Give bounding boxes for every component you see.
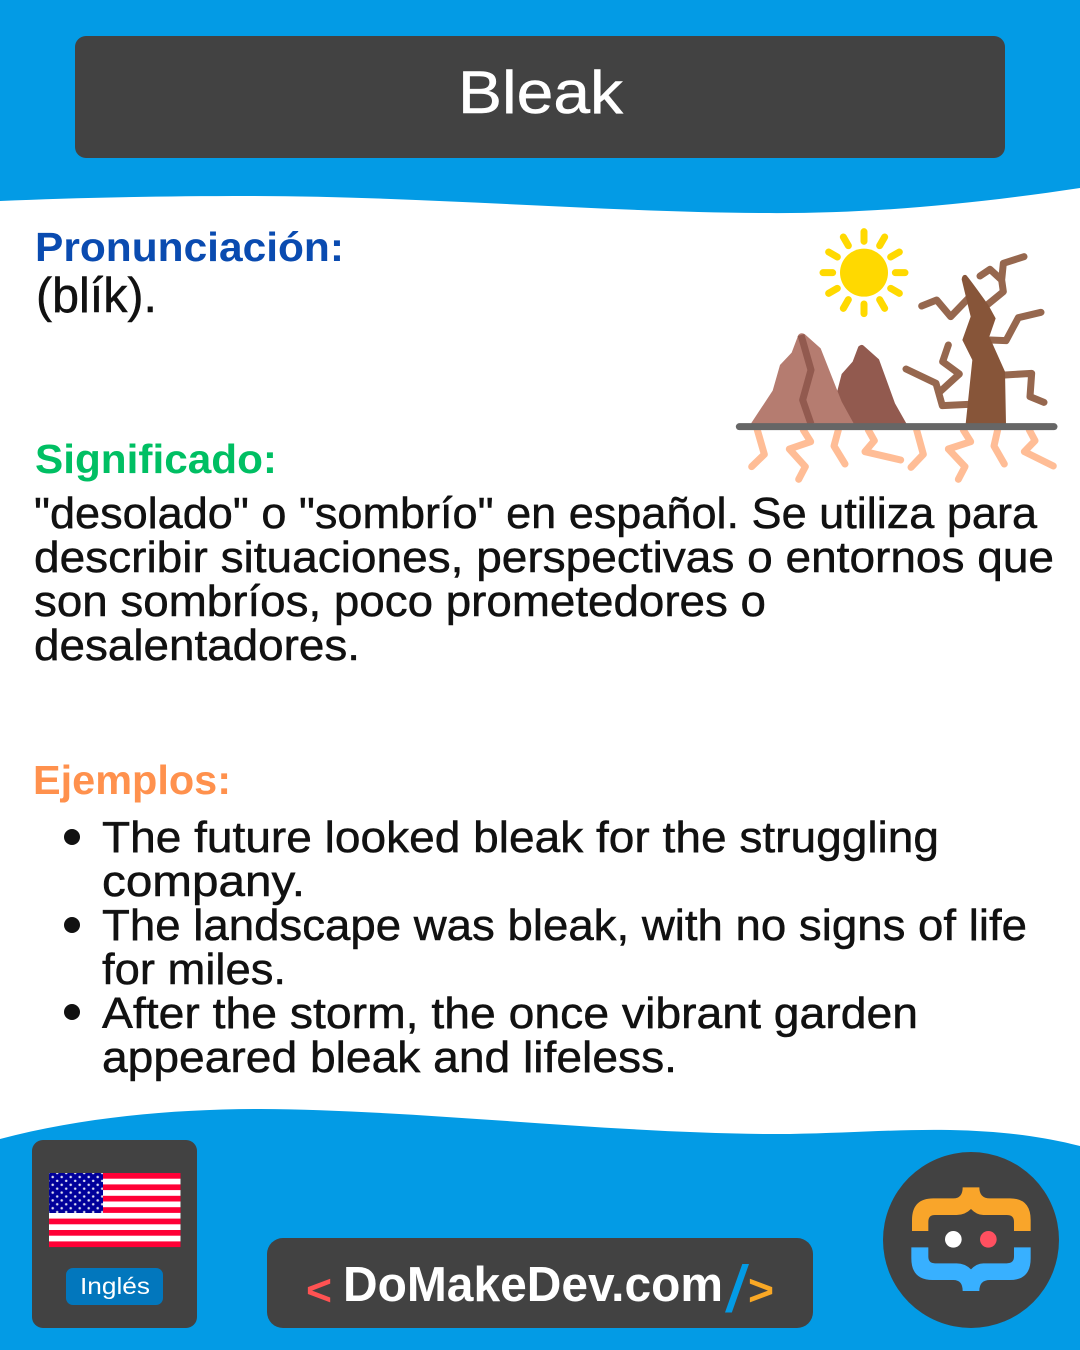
example 1: company. bbox=[102, 857, 305, 906]
example 3 bbox=[64, 989, 918, 1082]
icon: tree branches bbox=[906, 257, 1044, 406]
language badge bbox=[66, 1268, 163, 1305]
heading: examples: Ejemplos: bbox=[33, 757, 231, 803]
website name: DoMakeDev.com bbox=[343, 1258, 723, 1312]
logo: red dot bbox=[980, 1231, 997, 1248]
example 1 bbox=[64, 813, 939, 906]
example 3: After the storm, the once vibrant garden bbox=[102, 989, 918, 1038]
logo: blue brace bbox=[911, 1247, 1031, 1291]
heading: pronunciation: Pronunciación: bbox=[35, 224, 344, 270]
heading: meaning: Significado: bbox=[35, 436, 277, 482]
example 2: for miles. bbox=[102, 945, 286, 994]
icon: ground line bbox=[739, 416, 1054, 437]
footer wave band bbox=[0, 1109, 1080, 1350]
title: Bleak bbox=[458, 59, 624, 126]
header wave band bbox=[0, 0, 1080, 213]
meaning paragraph: son sombríos, poco prometedores o bbox=[34, 577, 766, 626]
icon: front mountain bbox=[751, 333, 854, 424]
icon: barren landscape with sun, mountains and dead tree bbox=[739, 232, 1054, 479]
meaning paragraph: desalentadores. bbox=[34, 621, 360, 670]
pronunciation text: (blík). bbox=[36, 269, 157, 323]
logo: white dot bbox=[945, 1231, 962, 1248]
website slash: / bbox=[725, 1252, 750, 1326]
website closing bracket: > bbox=[748, 1266, 774, 1315]
icon: back mountain bbox=[837, 345, 907, 424]
meaning paragraph: "desolado" o "sombrío" en español. Se utiliza para bbox=[34, 489, 1038, 538]
example 1: The future looked bleak for the struggling bbox=[102, 813, 939, 862]
website panel bbox=[267, 1238, 813, 1328]
website opening bracket: < bbox=[306, 1266, 332, 1315]
icon: sun bbox=[823, 232, 905, 314]
example 2: The landscape was bleak, with no signs of life bbox=[102, 901, 1027, 950]
icon: roots bbox=[752, 430, 1053, 479]
title bar bbox=[75, 36, 1005, 158]
examples list bbox=[64, 813, 1027, 1082]
meaning paragraph bbox=[34, 489, 1054, 670]
example 2 bbox=[64, 901, 1027, 994]
meaning paragraph: describir situaciones, perspectivas o entornos que bbox=[34, 533, 1054, 582]
logo: orange brace bbox=[912, 1187, 1031, 1231]
language badge: Inglés bbox=[80, 1273, 150, 1299]
example 3: appeared bleak and lifeless. bbox=[102, 1033, 677, 1082]
logo badge bbox=[883, 1152, 1059, 1328]
icon: tree trunk bbox=[962, 275, 1006, 424]
language panel bbox=[32, 1140, 197, 1328]
icon: US flag bbox=[49, 1173, 180, 1247]
